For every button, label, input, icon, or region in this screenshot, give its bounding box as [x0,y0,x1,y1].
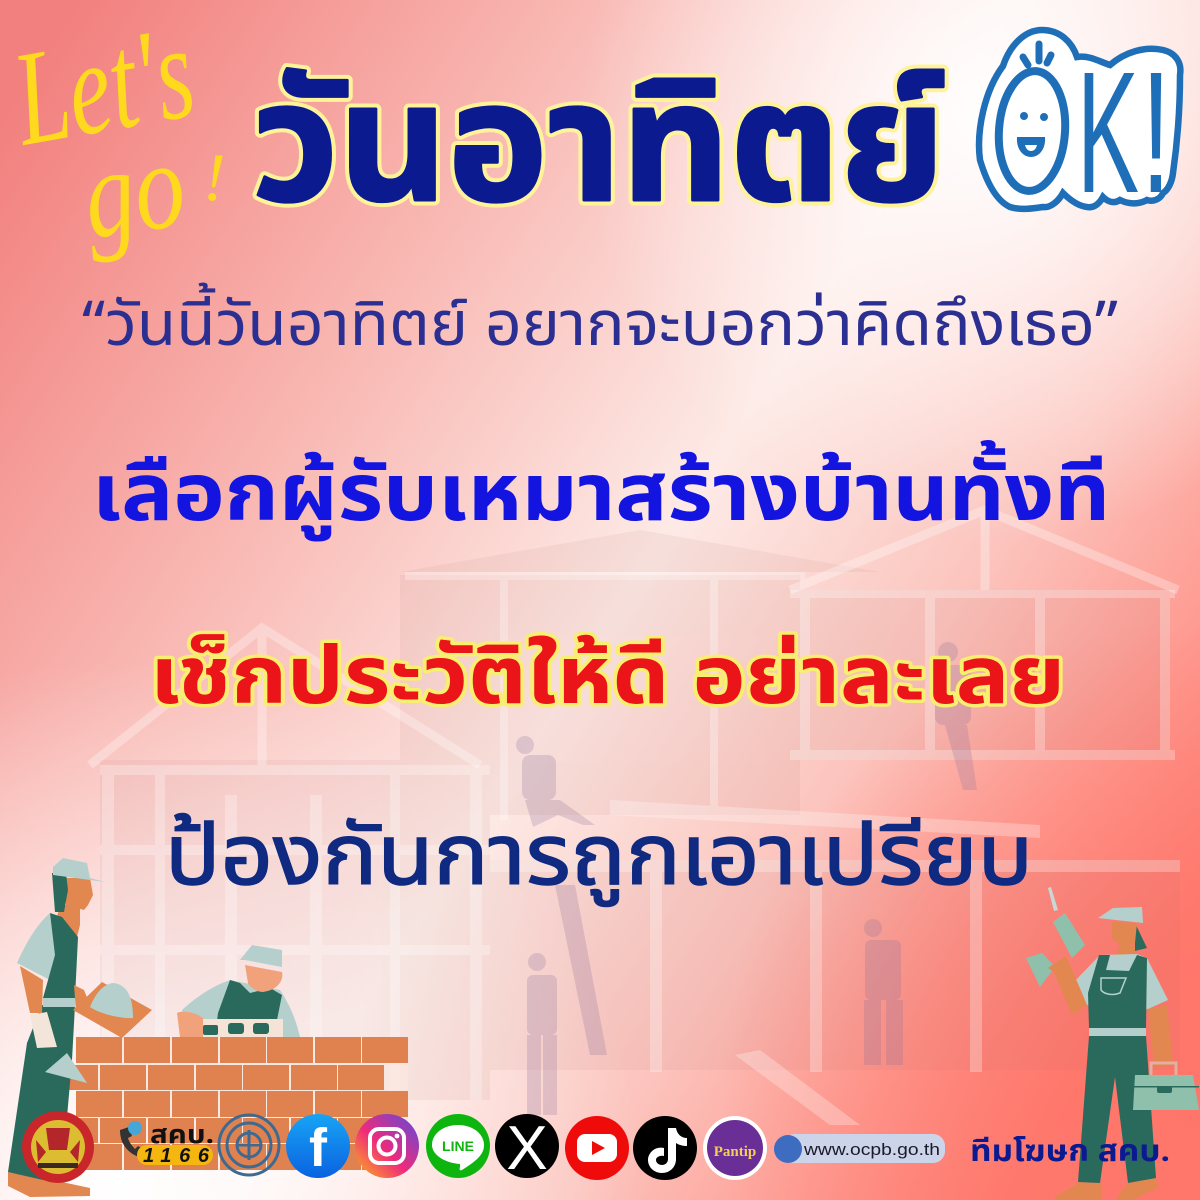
logo: hotline 1166: 1166 [143,1145,210,1167]
icon: OK sticker: ! [1141,35,1171,229]
icon: X: X [506,1114,548,1183]
icon: LINE [426,1114,490,1178]
heading: Let's go! script: ! [203,139,226,215]
logo: hotline 1166: สคบ. [150,1115,214,1155]
icon: OK sticker [979,30,1180,229]
title: วันอาทิตย์ [252,24,945,275]
headline: check history: เช็กประวัติให้ดี อย่าละเลย [150,618,1065,739]
icon: Facebook [286,1114,350,1178]
footer logo row [22,1111,1170,1183]
website link pill: www.ocpb.go.th [803,1140,940,1159]
icon: LINE: LINE [442,1138,474,1154]
icon: Instagram [355,1114,419,1178]
icon: OK sticker: K [1077,35,1139,229]
logo: hotline 1166 [120,1115,214,1167]
illustration: worker with drill and toolbox [1026,887,1199,1200]
headline: prevent exploitation: ป้องกันการถูกเอาเปรียบ [165,795,1033,922]
heading: Let's go! script: go [75,115,193,266]
heading: Let's go! script [2,0,226,266]
illustration: crouching bricklayer [177,945,300,1037]
headline: choose contractor: เลือกผู้รับเหมาสร้างบ้านทั้งที [92,435,1110,556]
icon: YouTube [565,1116,629,1180]
background illustration: houses under construction [90,510,1180,1125]
icon: TikTok [633,1116,697,1180]
illustration: brick wall [68,1037,408,1170]
icon: X [495,1114,559,1183]
quote line: “วันนี้วันอาทิตย์ อยากจะบอกว่าคิดถึงเธอ” [82,279,1118,373]
logo: Pantip: Pantip [714,1144,756,1160]
logo: CPC [219,1115,279,1175]
illustration: standing bricklayer [8,858,152,1197]
website link pill [774,1134,945,1163]
title: วันอาทิตย์ [252,24,945,275]
logo: OCPB emblem [22,1111,94,1183]
icon: Facebook: f [309,1118,328,1178]
team credit: ทีมโฆษก สคบ. [970,1129,1170,1175]
logo: Pantip [703,1116,767,1180]
